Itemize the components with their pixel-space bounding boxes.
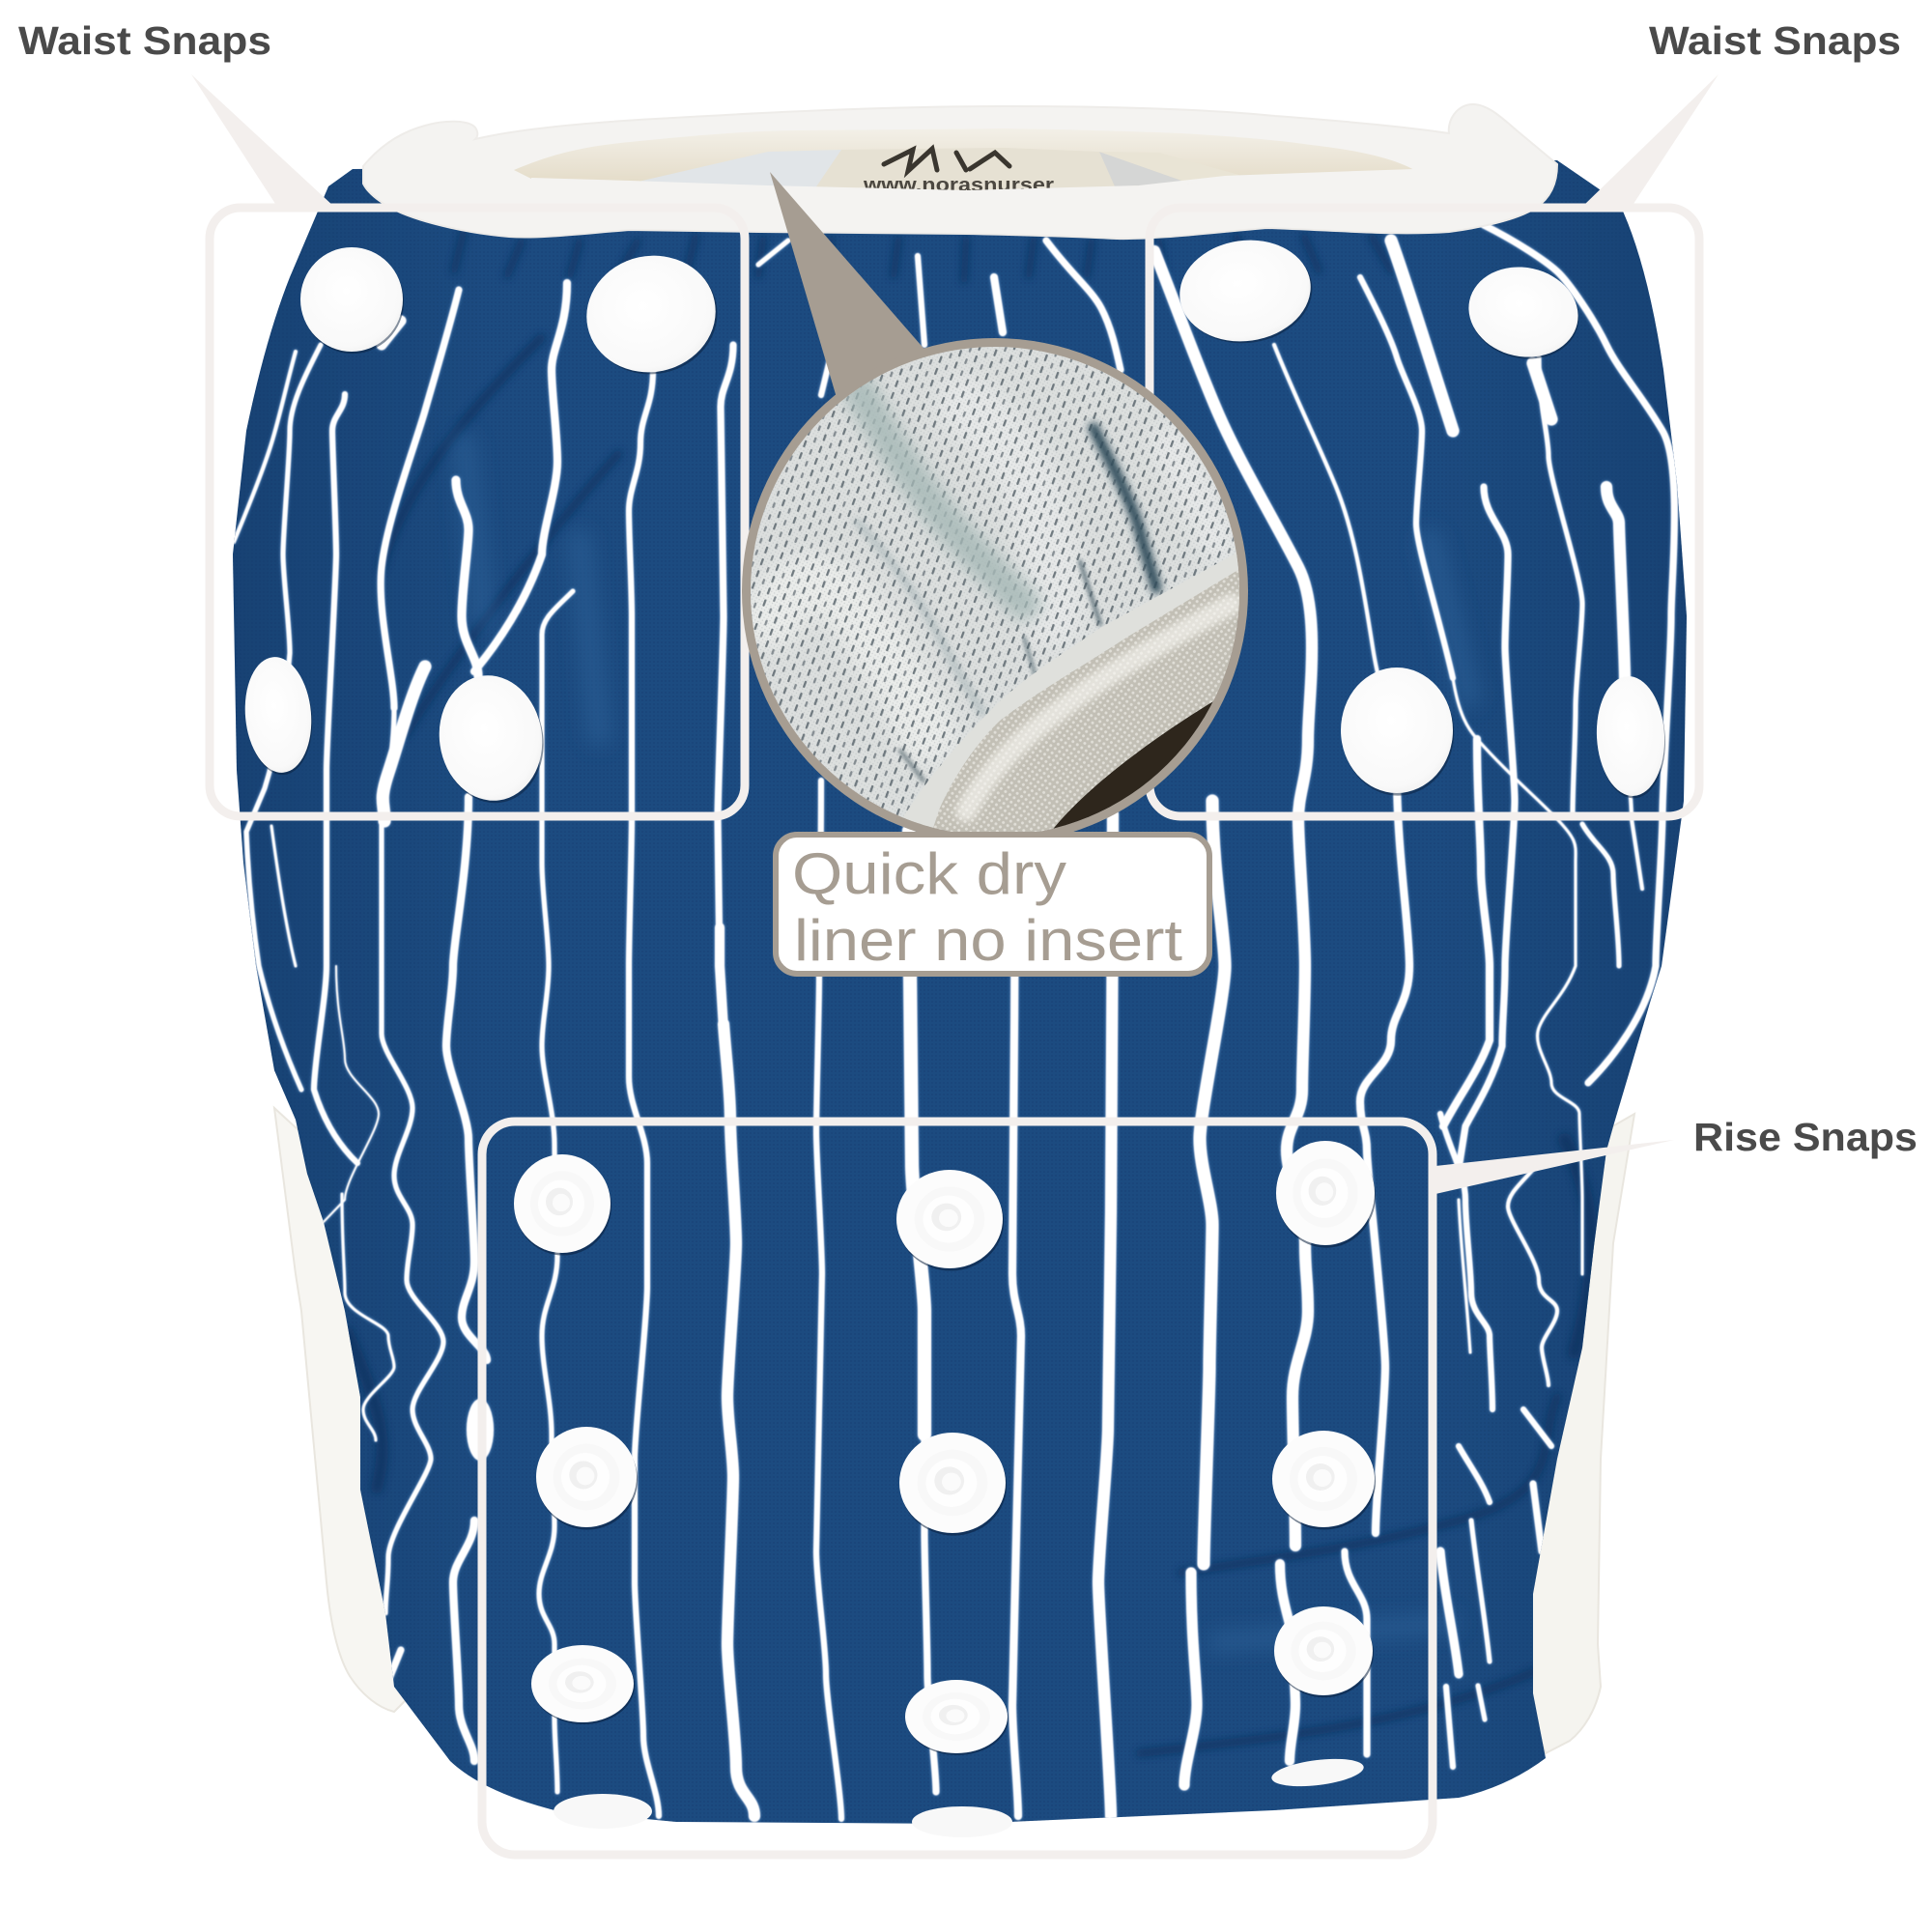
snap: [431, 668, 552, 810]
centre: [539, 591, 573, 1792]
diaper illustration: [222, 104, 1700, 1835]
binding edge strip: [902, 553, 1238, 828]
right centre: [1200, 801, 1225, 1564]
waist snaps group right: [1173, 232, 1668, 800]
heading right waist snaps: Waist Snaps: [1649, 18, 1901, 63]
care tag: www.norasnurser: [863, 175, 1054, 196]
callout pointer rise: [1435, 1140, 1674, 1194]
snap: [1173, 232, 1319, 352]
snap: [536, 1427, 638, 1530]
magnified liner circle: [742, 338, 1256, 850]
white stripes: [234, 225, 1674, 1819]
snap: [899, 1433, 1007, 1536]
snap: [1341, 668, 1454, 796]
navy fabric body: [233, 160, 1687, 1824]
highlight box left waist: [210, 208, 745, 816]
waist binding: [363, 104, 1557, 239]
label line one: Quick dry: [792, 841, 1066, 906]
callout pointer quick dry: [770, 172, 927, 401]
snap: [531, 1645, 635, 1724]
heading rise snaps: Rise Snaps: [1693, 1115, 1918, 1159]
snap: [1594, 674, 1668, 800]
dark shadow under binding: [1053, 701, 1213, 829]
waist snaps group left: [241, 243, 728, 810]
snap: [554, 1794, 652, 1829]
left side: [381, 290, 459, 708]
liner folds: [857, 391, 1156, 781]
quick dry label: [776, 835, 1209, 974]
highlight box rise: [482, 1122, 1433, 1855]
callout pointer left waist: [191, 74, 334, 207]
right side: [1360, 277, 1453, 678]
silver binding: [933, 570, 1239, 832]
snap: [1276, 1141, 1376, 1248]
snap: [1460, 257, 1587, 369]
snap: [576, 243, 728, 386]
snap: [241, 654, 317, 778]
heading left waist snaps: Waist Snaps: [18, 18, 271, 63]
fabric shading and folds: [222, 145, 1700, 1835]
snap: [514, 1154, 611, 1256]
care tag: [815, 148, 1242, 196]
label line two: liner no insert: [794, 908, 1182, 973]
rise snaps group: [514, 1141, 1376, 1837]
left leg binding: [274, 1108, 415, 1712]
snap: [912, 1806, 1012, 1837]
inner mesh liner: [630, 150, 841, 188]
highlight box right waist: [1150, 208, 1699, 816]
snap: [1272, 1431, 1376, 1530]
callout pointer right waist: [1582, 74, 1719, 207]
right leg binding: [1521, 1114, 1634, 1753]
inner waistband lining: [514, 128, 1414, 191]
snap: [1274, 1606, 1374, 1697]
snap: [300, 247, 404, 354]
snap: [896, 1170, 1004, 1271]
snap: [1270, 1754, 1365, 1791]
snap: [905, 1680, 1009, 1755]
